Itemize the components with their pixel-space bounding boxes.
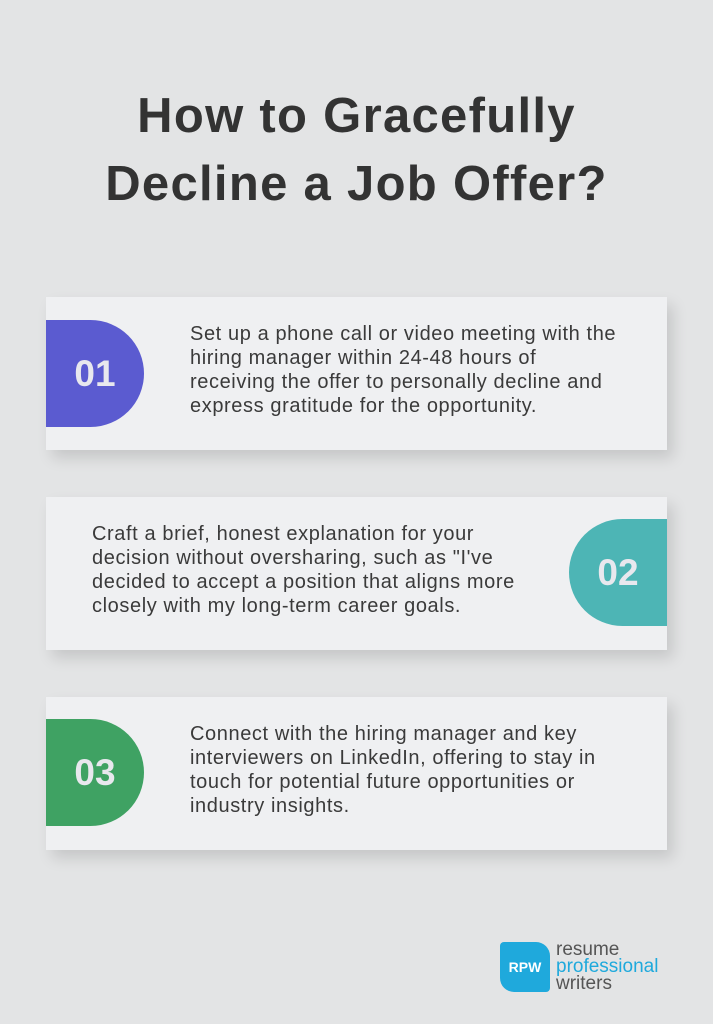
text step 3: Connect with the hiring manager and key bbox=[190, 723, 577, 745]
logo bbox=[500, 939, 658, 994]
title: How to Gracefully bbox=[137, 89, 576, 143]
badge 01 bbox=[46, 320, 144, 427]
text step 3: touch for potential future opportunities or bbox=[190, 771, 575, 793]
logo text: resume bbox=[556, 939, 619, 960]
text step 2: Craft a brief, honest explanation for your bbox=[92, 523, 474, 545]
text step 2 bbox=[92, 523, 515, 617]
logo text: professional bbox=[556, 956, 658, 977]
text step 1: Set up a phone call or video meeting with the bbox=[190, 323, 616, 345]
text step 2: decision without oversharing, such as "I've bbox=[92, 547, 493, 569]
badge 03: 03 bbox=[74, 752, 116, 792]
title: Decline a Job Offer? bbox=[105, 157, 608, 211]
panel: step 1 bbox=[46, 297, 667, 450]
text step 1: hiring manager within 24-48 hours of bbox=[190, 347, 536, 369]
text step 2: closely with my long-term career goals. bbox=[92, 595, 461, 617]
badge 03 bbox=[46, 719, 144, 826]
logo mark bbox=[500, 942, 550, 992]
badge 02: 02 bbox=[597, 552, 639, 592]
logo text: writers bbox=[556, 973, 612, 994]
text step 1: receiving the offer to personally decline and bbox=[190, 371, 602, 393]
text step 1: express gratitude for the opportunity. bbox=[190, 395, 537, 417]
title bbox=[105, 89, 608, 211]
logo text bbox=[556, 939, 658, 994]
text step 3: interviewers on LinkedIn, offering to stay in bbox=[190, 747, 596, 769]
panel: step 2 bbox=[46, 497, 667, 650]
text step 3: industry insights. bbox=[190, 795, 350, 817]
panel: step 3 bbox=[46, 697, 667, 850]
text step 1 bbox=[190, 323, 616, 417]
logo mark: RPW bbox=[509, 959, 541, 975]
text step 2: decided to accept a position that aligns more bbox=[92, 571, 515, 593]
badge 01: 01 bbox=[74, 352, 116, 394]
badge 02 bbox=[569, 519, 667, 626]
text step 3 bbox=[190, 723, 596, 817]
